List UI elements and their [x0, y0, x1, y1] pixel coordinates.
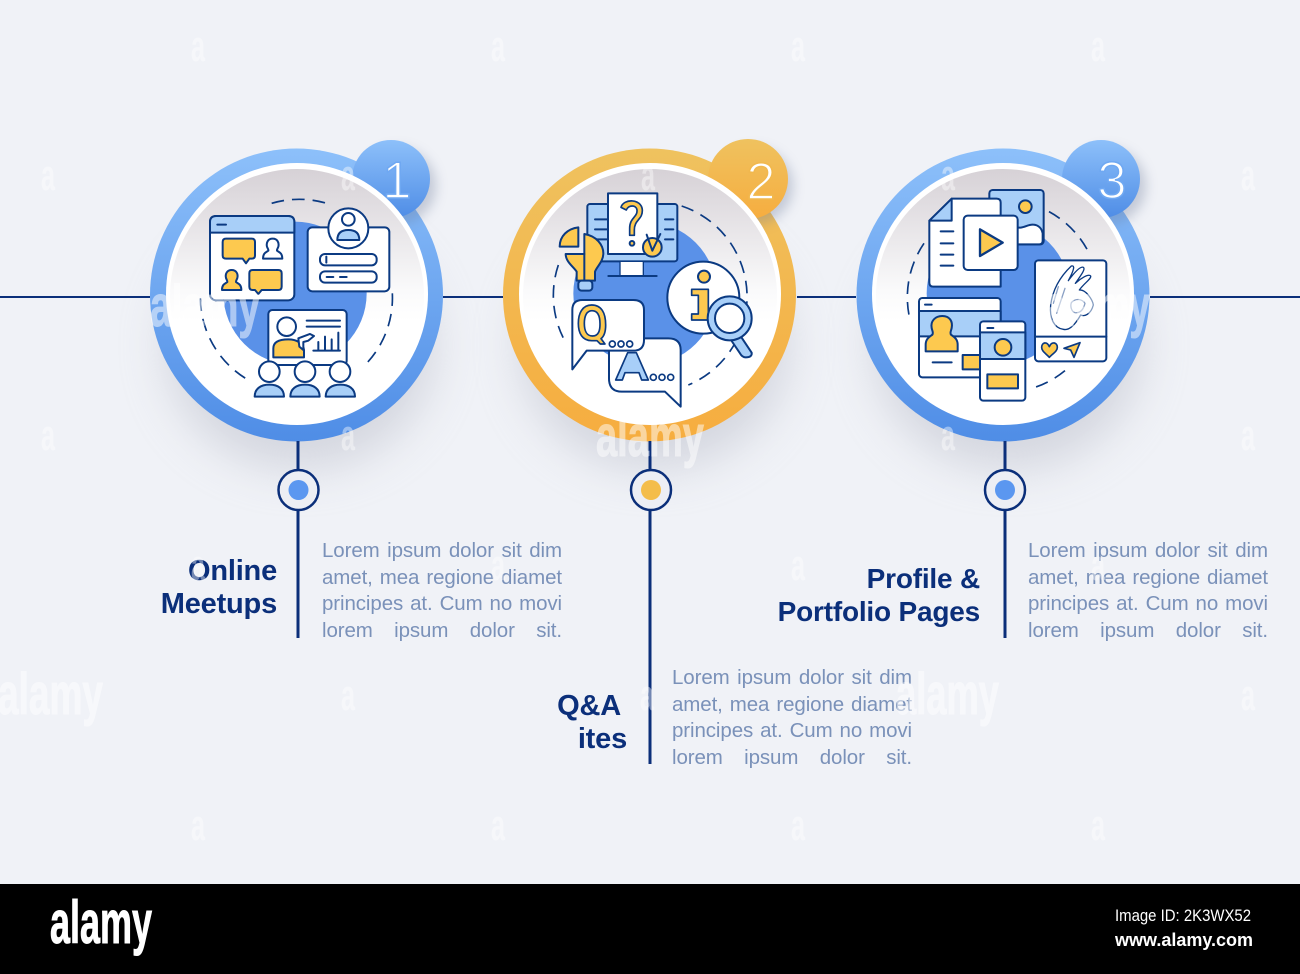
heading: online meetups: Online [188, 555, 277, 587]
watermark overlay: a [191, 801, 205, 850]
heading: Q&A sites: ites [578, 723, 627, 755]
heading: profile and portfolio pages [778, 563, 980, 627]
badge 1 [352, 140, 430, 218]
text block: online meetups: lorem ipsum dolor sit. [322, 619, 562, 642]
watermark overlay: a [941, 411, 955, 460]
watermark overlay: a [640, 671, 654, 720]
watermark overlay: a [491, 22, 505, 71]
connector lines [0, 297, 1300, 764]
circle 1: online meetups [150, 140, 443, 470]
text block: online meetups: principes at. Cum no movi [322, 592, 562, 615]
watermark overlay: a [41, 151, 55, 200]
watermark overlay: a [191, 22, 205, 71]
circle 2: Q&A sites [503, 139, 796, 470]
heading: online meetups [161, 555, 277, 620]
watermark overlay: a [791, 541, 805, 590]
text block: online meetups: amet, mea regione diamet [322, 566, 562, 589]
watermark overlay: alamy [1045, 274, 1150, 339]
badge 1: 1 [383, 152, 411, 210]
badge 2: 2 [747, 153, 775, 211]
text block: Q&A sites: lorem ipsum dolor sit. [672, 746, 912, 769]
text block: online meetups: Lorem ipsum dolor sit dim [322, 539, 562, 562]
badge 2 [708, 139, 788, 219]
heading: online meetups: Meetups [161, 588, 277, 620]
badge 3: 3 [1098, 152, 1126, 210]
watermark overlay: alamy [596, 404, 704, 469]
text block: profile and portfolio pages: principes at. Cum no movi [1028, 592, 1268, 615]
watermark overlay: alamy [150, 274, 260, 339]
watermark overlay: a [1091, 541, 1105, 590]
footer logo and image id: www.alamy.com [1114, 930, 1253, 950]
watermark overlay: a [341, 151, 355, 200]
watermark overlay: a [491, 541, 505, 590]
watermark overlay: alamy [0, 662, 103, 727]
text block: Q&A sites: Lorem ipsum dolor sit dim [672, 666, 912, 689]
heading: Q&A sites: Q&A [557, 690, 621, 722]
text block: Q&A sites [672, 666, 912, 769]
text block: Q&A sites: principes at. Cum no movi [672, 719, 912, 742]
watermark overlay: a [41, 411, 55, 460]
watermark overlay: a [341, 671, 355, 720]
heading: Q&A sites [557, 690, 627, 755]
timeline node 1 [278, 470, 318, 510]
footer logo and image id: alamy [50, 889, 152, 956]
watermark overlay: alamy [896, 662, 999, 727]
watermark overlay: a [941, 151, 955, 200]
badge 3 [1062, 140, 1140, 218]
text block: Q&A sites: amet, mea regione diamet [672, 693, 912, 716]
watermark overlay: a [1091, 22, 1105, 71]
footer logo and image id: Image ID: 2K3WX52 [1115, 906, 1251, 925]
footer logo and image id [50, 889, 1253, 956]
circle 3: profile and portfolio pages [856, 140, 1150, 470]
watermark overlay: a [791, 22, 805, 71]
heading: profile and portfolio pages: Profile & [867, 563, 980, 594]
watermark overlay: a [1241, 671, 1255, 720]
text block: online meetups [322, 539, 562, 642]
watermark overlay: a [1241, 411, 1255, 460]
text block: profile and portfolio pages: Lorem ipsum dolor sit dim [1028, 539, 1268, 562]
watermark overlay: a [1241, 151, 1255, 200]
text block: profile and portfolio pages: lorem ipsum dolor sit. [1028, 619, 1268, 642]
timeline node 2 [631, 470, 671, 510]
text block: profile and portfolio pages [1028, 539, 1268, 642]
icon: profile and portfolio [907, 190, 1106, 401]
heading: profile and portfolio pages: Portfolio Pages [778, 596, 980, 627]
icon: questions and answers [553, 193, 752, 407]
text block: profile and portfolio pages: amet, mea regione diamet [1028, 566, 1268, 589]
timeline node 3 [985, 470, 1025, 510]
watermark overlay: a [641, 151, 655, 200]
watermark overlay: a [341, 411, 355, 460]
footer bar [0, 884, 1300, 974]
watermark overlay: a [1091, 801, 1105, 850]
watermark overlay: a [791, 801, 805, 850]
watermark overlay: a [191, 541, 205, 590]
watermark overlay: a [491, 801, 505, 850]
icon: online meetups [200, 199, 392, 397]
